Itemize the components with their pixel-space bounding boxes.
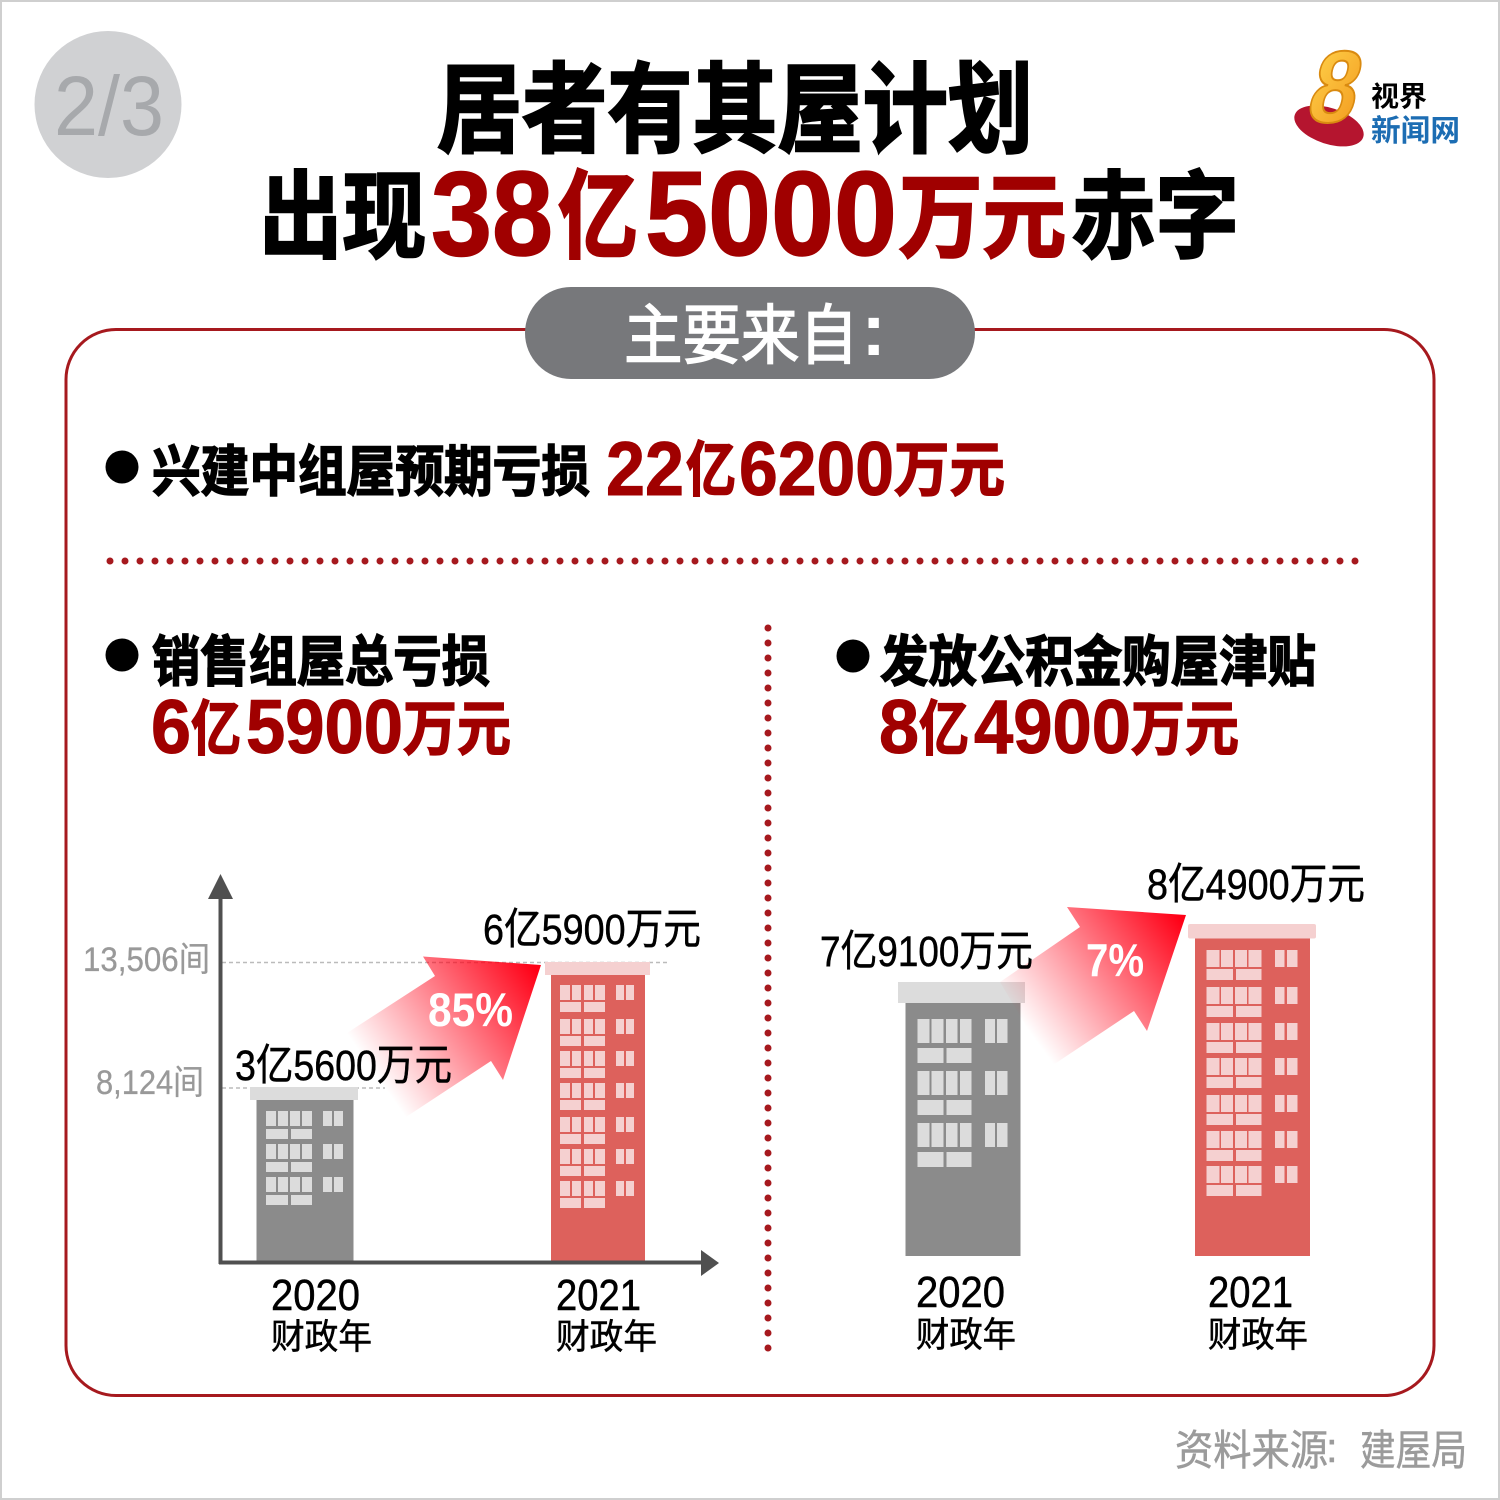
item: 发放公积金购屋津贴: 4900 [974, 685, 1131, 770]
item: 兴建中组屋预期亏损: 万元 [894, 422, 1005, 509]
pill heading: 主要来自: : [862, 290, 886, 371]
year 2020: 2020 [271, 1271, 360, 1320]
building 2020 [250, 1087, 358, 1260]
left chart: 销售组屋 [83, 874, 719, 1357]
year 2020: 2020 [916, 1268, 1005, 1317]
right chart: 公积金津贴 [820, 861, 1365, 1355]
x axis with arrow [219, 1250, 719, 1276]
logo: 8视界新闻网: 8 [1299, 29, 1373, 144]
y axis with arrow [208, 874, 233, 1264]
item: 销售组屋总亏损: 万元 [403, 681, 511, 768]
pill heading: 主要来自 [525, 283, 975, 379]
title [259, 31, 1239, 281]
title: 居者有其屋计划 [437, 31, 1033, 173]
logo: 8视界新闻网 [1289, 29, 1460, 154]
building 2021 [545, 962, 650, 1260]
item: 销售组屋总亏损: 5900 [246, 685, 403, 770]
page number badge 2/3 [34, 31, 182, 178]
item: 发放公积金购屋津贴 [836, 617, 1316, 770]
year 2021: 2021 [556, 1271, 641, 1320]
item: 兴建中组屋预期亏损: 亿 [686, 422, 736, 509]
year 2021: 财政年 [556, 1318, 657, 1357]
value 6亿5900万元: 6亿5900万元 [483, 906, 701, 954]
arrow 85%: 85% [428, 983, 513, 1036]
main panel frame [66, 330, 1434, 1396]
building 2020 [898, 982, 1025, 1256]
item: 兴建中组屋预期亏损: 22 [606, 427, 684, 512]
y label 13,506: 13,506间 [83, 941, 210, 979]
source line: : [1326, 1424, 1338, 1471]
y label 8,124: 8,124间 [96, 1064, 204, 1102]
title: 5000 [645, 147, 897, 281]
title: 亿 [558, 139, 638, 278]
item: 发放公积金购屋津贴: 发放公积金购屋津贴 [880, 617, 1316, 697]
source line: 建屋局 [1360, 1427, 1467, 1474]
logo: 8视界新闻网: 视界 [1371, 75, 1427, 115]
year 2021: 财政年 [1208, 1316, 1308, 1355]
year 2021 [556, 1271, 657, 1357]
arrow 85% [347, 956, 541, 1117]
item: 销售组屋总亏损: 销售组屋总亏损 [152, 617, 490, 697]
item: 销售组屋总亏损: 亿 [191, 681, 241, 768]
item: 销售组屋总亏损: 6 [151, 685, 191, 770]
arrow 7%: 7% [1086, 934, 1144, 986]
year 2020 [916, 1268, 1016, 1355]
item: 兴建中组屋预期亏损: 6200 [739, 427, 894, 512]
item: 销售组屋总亏损 [106, 617, 511, 770]
item: 兴建中组屋预期亏损: 兴建中组屋预期亏损 [152, 427, 590, 507]
arrow 7% [1000, 907, 1186, 1067]
title: 万元 [899, 144, 1066, 277]
pill heading: 主要来自: 主要来自 [624, 283, 858, 377]
value 8亿4900万元: 8亿4900万元 [1147, 861, 1365, 909]
logo: 8视界新闻网: 新闻网 [1371, 106, 1460, 150]
page number badge 2/3: 2/3 [54, 59, 164, 153]
value 3亿5600万元: 3亿5600万元 [235, 1042, 452, 1090]
year 2020: 财政年 [916, 1316, 1016, 1355]
title: 38 [431, 147, 553, 281]
title: 赤字 [1072, 141, 1239, 278]
item: 兴建中组屋预期亏损 [106, 422, 1005, 512]
year 2021 [1208, 1268, 1308, 1355]
year 2021: 2021 [1208, 1268, 1293, 1317]
item: 发放公积金购屋津贴: 8 [879, 685, 919, 770]
year 2020 [271, 1271, 372, 1357]
source line [1175, 1424, 1467, 1474]
value 7亿9100万元: 7亿9100万元 [820, 928, 1033, 976]
title: 出现 [259, 141, 426, 278]
building 2021 [1188, 924, 1316, 1256]
year 2020: 财政年 [271, 1318, 372, 1357]
item: 发放公积金购屋津贴: 万元 [1131, 681, 1239, 768]
item: 发放公积金购屋津贴: 亿 [919, 681, 969, 768]
source line: 资料来源 [1175, 1427, 1328, 1474]
